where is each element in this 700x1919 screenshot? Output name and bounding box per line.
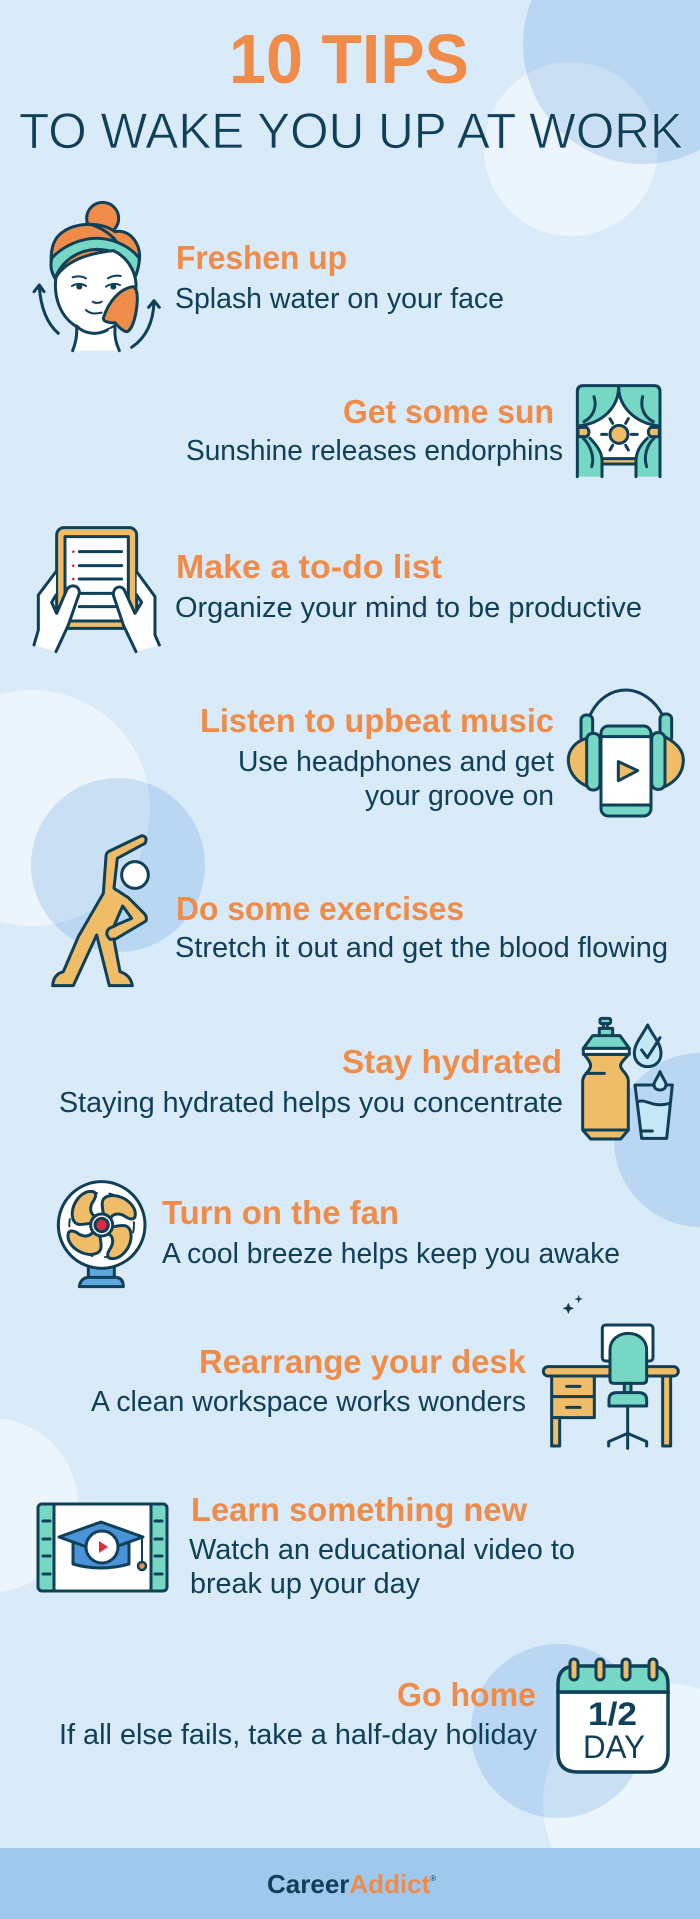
icon: educational video bbox=[38, 1504, 167, 1591]
heading: Make a to-do list bbox=[176, 548, 442, 585]
heading: Turn on the fan bbox=[162, 1194, 399, 1231]
tip 7: turn on the fan bbox=[58, 1182, 620, 1287]
icon: headphones and phone bbox=[568, 690, 683, 816]
icon: water bottle and glass bbox=[583, 1018, 672, 1139]
body text: Stretch it out and get the blood flowing bbox=[175, 932, 668, 964]
body text: break up your day bbox=[190, 1568, 421, 1600]
heading: Learn something new bbox=[191, 1491, 527, 1528]
body text bbox=[189, 1534, 575, 1600]
body text: Staying hydrated helps you concentrate bbox=[59, 1087, 563, 1119]
body text: A clean workspace works wonders bbox=[91, 1386, 526, 1418]
heading: Listen to upbeat music bbox=[200, 702, 554, 739]
icon: half-day calendar: 1/2 bbox=[588, 1696, 637, 1732]
icon: face with splash bbox=[34, 202, 159, 351]
icon: desk fan bbox=[58, 1182, 145, 1287]
heading: Get some sun bbox=[343, 393, 554, 430]
title: 10 TIPS bbox=[229, 20, 469, 98]
title: TO WAKE YOU UP AT WORK bbox=[19, 103, 683, 159]
body text: If all else fails, take a half-day holiday bbox=[59, 1719, 538, 1751]
tip 1: freshen up bbox=[34, 202, 504, 351]
tip 10: go home bbox=[59, 1659, 668, 1772]
icon: hands holding tablet bbox=[34, 528, 159, 652]
icon: half-day calendar: DAY bbox=[583, 1729, 645, 1765]
heading: Go home bbox=[397, 1676, 536, 1713]
body text: A cool breeze helps keep you awake bbox=[162, 1238, 620, 1270]
tip 5: do some exercises bbox=[53, 836, 668, 986]
body text: Watch an educational video to bbox=[189, 1534, 575, 1566]
heading: Rearrange your desk bbox=[199, 1343, 527, 1380]
heading: Do some exercises bbox=[176, 890, 464, 927]
footer band bbox=[0, 1848, 700, 1919]
logo: CareerAddict bbox=[267, 1869, 430, 1899]
body text: Use headphones and get bbox=[238, 746, 554, 778]
logo: ® bbox=[430, 1874, 436, 1883]
tip 6: stay hydrated bbox=[59, 1018, 672, 1139]
title bbox=[19, 20, 683, 159]
tip 8: rearrange your desk bbox=[91, 1295, 678, 1448]
icon: stretching figure bbox=[53, 836, 148, 986]
tip 3: make a to-do list bbox=[34, 528, 642, 652]
body text bbox=[238, 746, 554, 812]
heading: Stay hydrated bbox=[342, 1043, 562, 1080]
tip 4: listen to upbeat music bbox=[200, 690, 683, 816]
tip 2: get some sun bbox=[186, 386, 660, 477]
body text: Splash water on your face bbox=[175, 283, 504, 315]
body text: your groove on bbox=[365, 780, 554, 812]
heading: Freshen up bbox=[176, 239, 347, 276]
body text: Organize your mind to be productive bbox=[175, 592, 642, 624]
tip 9: learn something new bbox=[38, 1491, 575, 1600]
icon: desk and chair bbox=[543, 1295, 678, 1448]
icon: half-day calendar bbox=[558, 1659, 668, 1772]
body text: Sunshine releases endorphins bbox=[186, 435, 563, 467]
icon: window with curtains bbox=[577, 386, 660, 477]
